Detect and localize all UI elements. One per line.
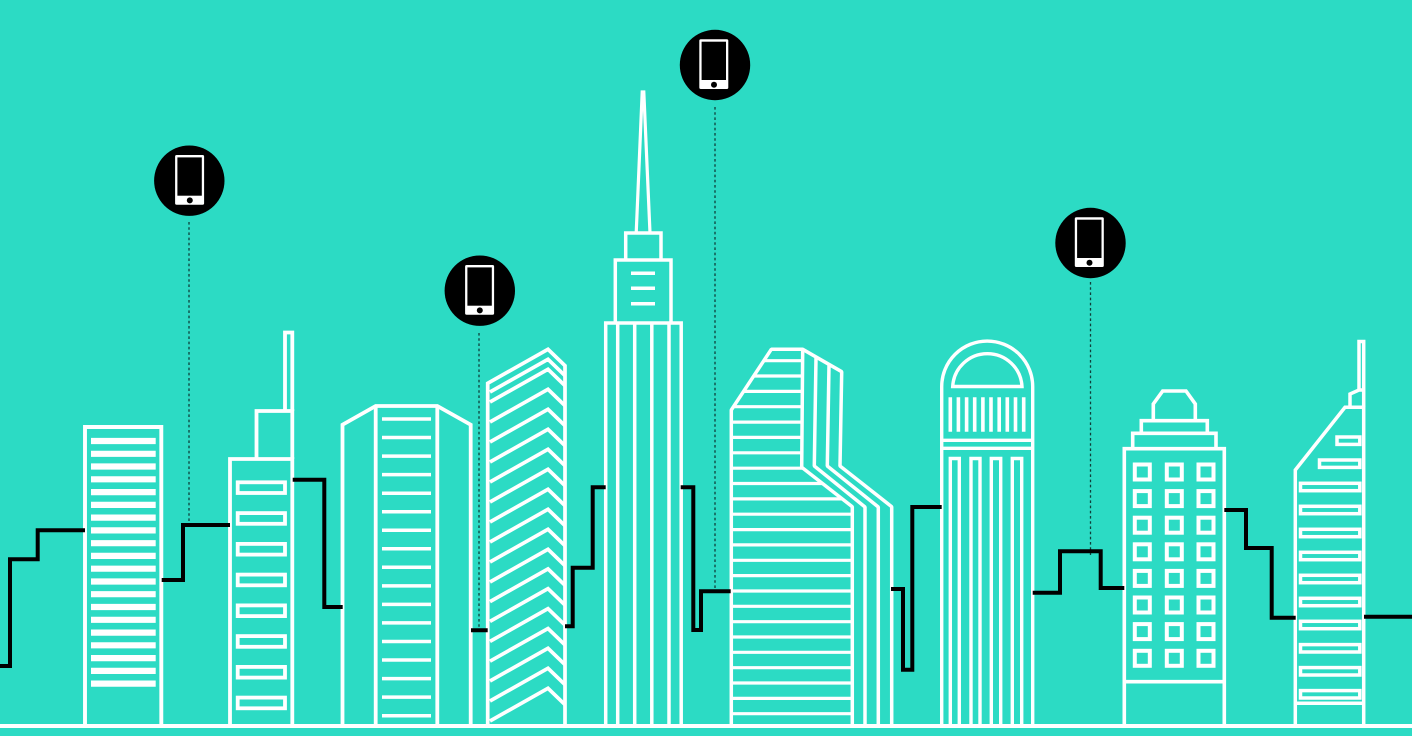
stepped black network line <box>0 480 1412 670</box>
building 5: spire tower <box>606 92 681 726</box>
building 2: tower with antenna <box>230 332 292 726</box>
building 4: chevron tower <box>488 349 565 726</box>
icon: phone badge 1 <box>154 146 224 216</box>
building 3: chamfered tower <box>342 406 471 726</box>
building 1: striped tower <box>85 427 161 726</box>
building 7: domed tower <box>942 341 1033 726</box>
icon: phone badge 3 <box>680 30 750 100</box>
ground line <box>0 724 1412 728</box>
building 9: slanted tower with antenna <box>1295 342 1364 726</box>
dotted connector lines <box>189 107 1090 629</box>
icon: phone badge 2 <box>445 256 515 326</box>
building 8: grid-window tower <box>1124 391 1224 726</box>
icon: phone badge 4 <box>1055 208 1126 278</box>
building 6: stepped striped tower <box>731 349 892 726</box>
